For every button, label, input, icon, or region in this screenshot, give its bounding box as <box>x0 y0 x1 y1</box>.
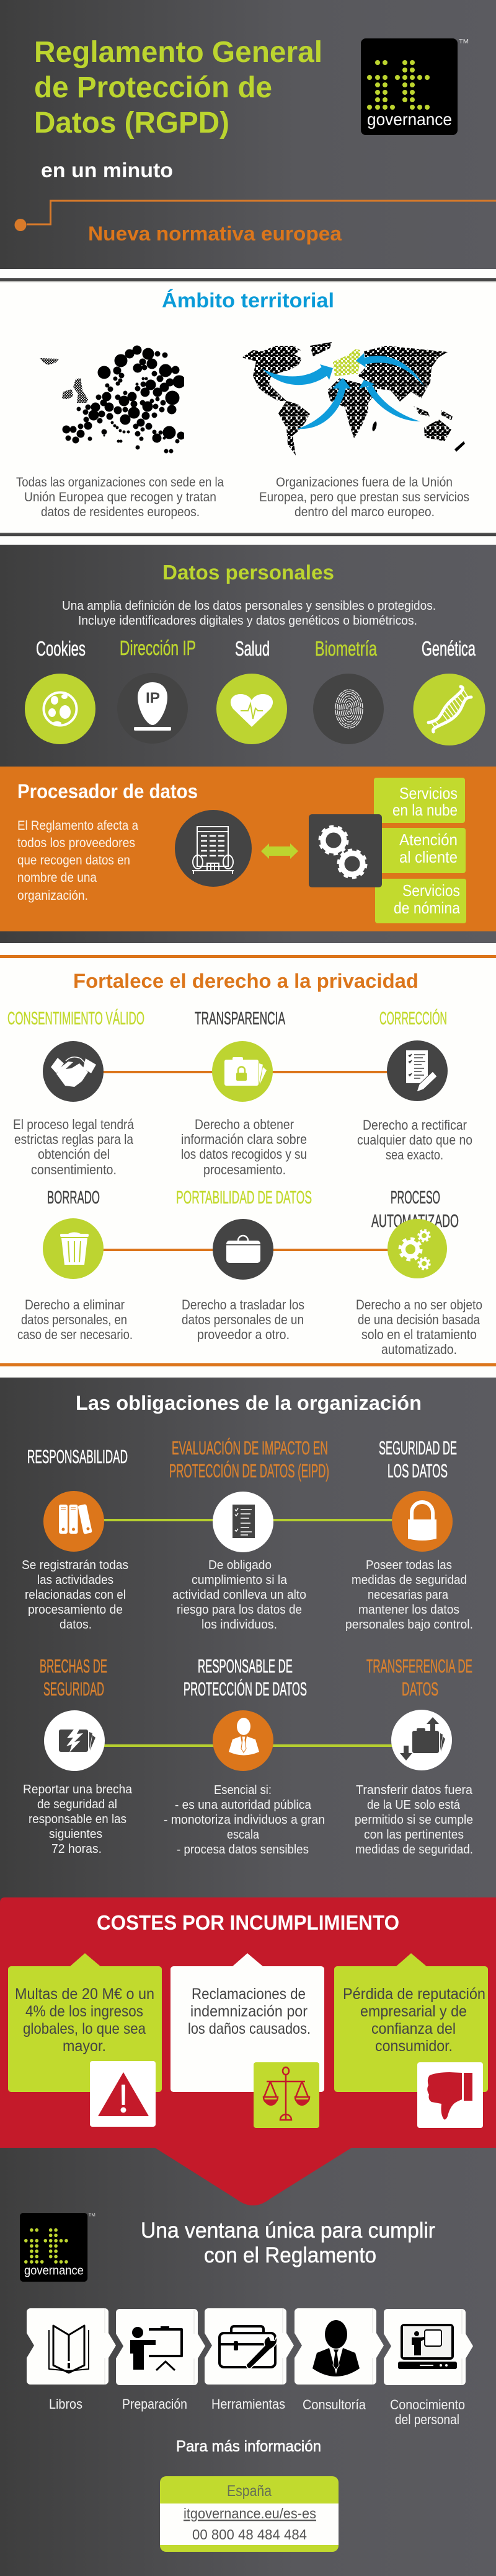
card: fines: mayor. <box>63 2038 106 2055</box>
services boxes: en la nube <box>392 801 458 819</box>
title: Reglamento General <box>34 36 322 69</box>
panel: non-compliance costs <box>0 1897 496 2205</box>
text: DPO: - monotoriza individuos a gran <box>164 1813 325 1827</box>
headings row 2: PORTABILIDAD DE DATOS <box>176 1188 312 1208</box>
text: accountability: las actividades <box>37 1573 113 1587</box>
icon: data transfer folder <box>391 1710 452 1770</box>
card: claims: los daños causados. <box>188 2020 311 2038</box>
icon: data protection officer <box>213 1710 273 1771</box>
panel: privacy rights <box>7 970 482 1357</box>
logo: IT Governance: TM <box>459 38 469 45</box>
headings row 2 <box>47 1188 459 1231</box>
heading <box>141 2218 435 2267</box>
headings row 2: PROCESO <box>391 1188 440 1208</box>
icon: security breach folder <box>44 1710 105 1771</box>
text: transfers: Transferir datos fuera <box>356 1783 473 1797</box>
text: data security <box>345 1558 473 1632</box>
panel: header <box>0 0 496 269</box>
text: accountability <box>22 1558 128 1632</box>
icon: erasure bin <box>43 1218 104 1279</box>
headings row 1: PROTECCIÓN DE DATOS (EIPD) <box>169 1460 329 1482</box>
card: reputation: Pérdida de reputación <box>343 1985 485 2003</box>
heading: COSTES POR INCUMPLIMIENTO <box>97 1911 399 1934</box>
tile: training <box>116 2309 205 2385</box>
body text: que recogen datos en <box>17 853 130 868</box>
connectors <box>73 1071 417 1251</box>
intro text: Una amplia definición de los datos personales y sensibles o protegidos. <box>62 599 436 613</box>
text: breaches <box>23 1783 133 1856</box>
text: data security: medidas de seguridad <box>352 1573 467 1587</box>
text: rectification: cualquier dato que no <box>357 1132 472 1148</box>
divider lines <box>0 955 496 1366</box>
text: transfers: medidas de seguridad. <box>355 1843 473 1857</box>
text: erasure <box>17 1297 133 1342</box>
panel: data processor <box>0 767 496 931</box>
subtitle: en un minuto <box>41 159 173 182</box>
text: DPIA: actividad conlleva un alto <box>172 1588 306 1602</box>
title: de Protección de <box>34 71 272 104</box>
body text: nombre de una <box>17 871 97 885</box>
title <box>34 36 322 139</box>
text: transfers: permitido si se cumple <box>355 1813 473 1827</box>
heading: con el Reglamento <box>204 2243 376 2267</box>
headings row 2: BRECHAS DE <box>40 1655 107 1677</box>
panel: one-stop compliance <box>20 2213 473 2552</box>
text: non-EU organisations: Organizaciones fuera de la Unión <box>276 475 453 490</box>
tile labels: Preparación <box>122 2396 187 2412</box>
icon: portability briefcase <box>213 1219 273 1280</box>
labels: Salud <box>235 637 270 660</box>
text: transfers: con las pertinentes <box>364 1828 464 1842</box>
services boxes: de nómina <box>394 899 460 917</box>
heading: Las obligaciones de la organización <box>76 1392 422 1414</box>
icon: warning <box>90 2061 156 2127</box>
text: data security: necesarias para <box>368 1588 449 1602</box>
labels: Cookies <box>36 637 86 660</box>
intro text <box>62 599 436 628</box>
services boxes: Atención <box>399 830 458 849</box>
headings row 1: EVALUACIÓN DE IMPACTO EN <box>172 1437 328 1459</box>
card: claims: indemnización por <box>190 2003 308 2020</box>
logo: IT Governance <box>361 38 469 135</box>
tile: tools <box>205 2308 294 2385</box>
text: transparency: información clara sobre <box>181 1132 307 1147</box>
tagline: Nueva normativa europea <box>88 222 342 245</box>
heading: Ámbito territorial <box>162 289 334 312</box>
icon: DPIA checklist <box>213 1492 273 1552</box>
text: valid consent <box>13 1117 135 1177</box>
text: EU organisations <box>16 475 224 519</box>
text: valid consent: El proceso legal tendrá <box>13 1117 135 1132</box>
icon: IP address pin: IP <box>146 690 160 706</box>
text: transparency <box>181 1117 307 1177</box>
text: portability: datos personales de un <box>182 1312 304 1327</box>
contact card: España <box>227 2482 272 2500</box>
connectors <box>74 1519 422 1747</box>
divider strips <box>0 278 496 537</box>
contact card <box>160 2476 339 2552</box>
text: valid consent: obtención del <box>38 1146 110 1162</box>
icon: automated gears <box>388 1219 447 1278</box>
headings row 2: SEGURIDAD <box>43 1678 104 1700</box>
text: automated processing <box>356 1297 482 1357</box>
text: non-EU organisations: dentro del marco europeo. <box>294 505 435 519</box>
panel: personal data <box>0 545 496 767</box>
card: reputation: empresarial y de <box>360 2003 467 2020</box>
text: DPO: Esencial si: <box>214 1783 272 1797</box>
text: accountability: relacionadas con el <box>25 1588 126 1602</box>
tile labels: Herramientas <box>211 2396 285 2412</box>
text: rectification: sea exacto. <box>386 1147 443 1163</box>
icon: processor gears <box>309 814 382 887</box>
text: non-EU organisations <box>259 475 469 519</box>
card: fines: globales, lo que sea <box>23 2020 146 2038</box>
labels <box>36 636 476 660</box>
body text: organización. <box>17 889 88 903</box>
icon: thumbs down <box>417 2062 483 2128</box>
text: accountability: procesamiento de <box>28 1603 123 1617</box>
text: transfers <box>355 1783 473 1857</box>
services boxes: Servicios <box>399 784 458 802</box>
body text: todos los proveedores <box>17 836 135 850</box>
headings row 2 <box>40 1655 472 1700</box>
text: breaches: de seguridad al <box>37 1798 117 1811</box>
text: rectification: Derecho a rectificar <box>363 1117 467 1133</box>
text: accountability: datos. <box>60 1618 92 1632</box>
headings row 2: BORRADO <box>47 1188 100 1208</box>
text: transfers: de la UE solo está <box>367 1798 461 1812</box>
icon: transparency folder <box>212 1041 273 1102</box>
map: world with arrows <box>242 342 465 455</box>
labels: Biometría <box>315 637 377 660</box>
text: non-EU organisations: Europea, pero que prestan sus servicios <box>259 490 469 504</box>
icon: health heart <box>216 674 287 744</box>
headings row 1: LOS DATOS <box>388 1460 448 1482</box>
text: erasure: datos personales, en <box>21 1312 127 1327</box>
icon: cookie <box>25 674 95 744</box>
heading: Datos personales <box>162 561 334 584</box>
card: claims <box>170 1953 324 2092</box>
contact card: 00 800 48 484 484 <box>192 2526 307 2543</box>
icon: security padlock <box>392 1491 453 1552</box>
logo: IT Governance small: TM <box>89 2213 95 2218</box>
text: breaches: responsable en las <box>29 1813 126 1826</box>
tile: staff awareness <box>384 2309 473 2385</box>
text: DPIA: cumplimiento si la <box>192 1573 288 1587</box>
text: EU organisations: Unión Europea que recogen y tratan <box>24 490 216 504</box>
card: reputation <box>334 1953 488 2092</box>
text: portability: proveedor a otro. <box>197 1327 290 1342</box>
headings row 1: TRANSPARENCIA <box>195 1009 285 1029</box>
text: accountability: Se registrarán todas <box>22 1558 128 1572</box>
labels: Dirección IP <box>120 636 196 659</box>
tile labels: Libros <box>49 2396 82 2412</box>
panel: territorial scope <box>16 289 469 519</box>
title: Datos (RGPD) <box>34 107 229 139</box>
text: breaches: siguientes <box>49 1827 102 1841</box>
text: automated processing: automatizado. <box>381 1342 457 1357</box>
card: reputation: confianza del <box>371 2020 456 2038</box>
text: transparency: procesamiento. <box>203 1162 286 1177</box>
headings row 1 <box>27 1437 457 1482</box>
heading: Fortalece el derecho a la privacidad <box>73 970 418 992</box>
text: transparency: los datos recogidos y su <box>181 1146 307 1162</box>
text: DPO: escala <box>227 1828 260 1842</box>
connector line <box>15 201 496 231</box>
more info heading: Para más información <box>176 2438 321 2455</box>
heading: Una ventana única para cumplir <box>141 2218 435 2243</box>
body text <box>17 819 138 903</box>
text: portability <box>182 1297 304 1342</box>
heading: Procesador de datos <box>17 780 198 802</box>
text: automated processing: solo en el tratamiento <box>361 1327 477 1342</box>
headings row 1: CONSENTIMIENTO VÁLIDO <box>7 1008 144 1029</box>
icon: handshake <box>43 1041 104 1102</box>
card: fines <box>8 1953 162 2092</box>
icon: fingerprint <box>313 674 384 744</box>
text: DPO <box>164 1783 325 1857</box>
text: DPIA: De obligado <box>208 1558 272 1572</box>
text: DPIA: los individuos. <box>202 1618 277 1632</box>
tile: consultancy <box>294 2308 384 2385</box>
text: erasure: caso de ser necesario. <box>17 1327 133 1342</box>
text: data security: personales bajo control. <box>345 1618 473 1632</box>
icon: scales <box>254 2062 319 2128</box>
contact card: itgovernance.eu/es-es <box>184 2505 316 2521</box>
card: reputation: consumidor. <box>375 2038 453 2055</box>
icon: record binders <box>43 1491 104 1552</box>
tile: books <box>27 2308 116 2385</box>
body text: El Reglamento afecta a <box>17 819 138 833</box>
text: EU organisations: Todas las organizaciones con sede en la <box>16 475 224 490</box>
text: transparency: Derecho a obtener <box>195 1117 294 1132</box>
headings row 1 <box>7 1008 447 1029</box>
services boxes <box>374 778 466 923</box>
text: portability: Derecho a trasladar los <box>182 1297 304 1312</box>
text: DPO: - procesa datos sensibles <box>177 1843 309 1857</box>
logo: IT Governance small <box>20 2213 95 2282</box>
icon: IP address pin <box>117 673 188 744</box>
text: rectification <box>357 1117 472 1163</box>
headings row 2: RESPONSABLE DE <box>198 1655 293 1677</box>
arrow: two-way <box>261 843 298 859</box>
text: data security: Poseer todas las <box>366 1558 452 1572</box>
icon: rectification checklist <box>387 1040 448 1101</box>
tile labels: Consultoría <box>303 2397 366 2412</box>
icon: DNA helix <box>413 674 485 745</box>
tile labels <box>49 2396 465 2427</box>
card: fines: Multas de 20 M€ o un <box>15 1985 154 2003</box>
card: claims: Reclamaciones de <box>192 1985 306 2003</box>
text: EU organisations: datos de residentes europeos. <box>41 505 200 519</box>
headings row 2: DATOS <box>402 1678 438 1700</box>
intro text: Incluye identificadores digitales y datos genéticos o biométricos. <box>78 613 417 628</box>
headings row 2: PROTECCIÓN DE DATOS <box>184 1678 307 1700</box>
text: breaches: Reportar una brecha <box>23 1783 133 1796</box>
text: DPO: - es una autoridad pública <box>175 1798 312 1812</box>
text: DPIA <box>172 1558 306 1632</box>
text: valid consent: consentimiento. <box>31 1162 117 1177</box>
card: fines: 4% de los ingresos <box>25 2003 143 2020</box>
text: valid consent: estrictas reglas para la <box>14 1132 134 1147</box>
logo: IT Governance: governance <box>367 110 452 129</box>
text: breaches: 72 horas. <box>51 1842 102 1856</box>
dark strip <box>0 931 496 943</box>
text: DPIA: riesgo para los datos de <box>177 1603 302 1617</box>
icon: office building <box>175 810 252 887</box>
logo: IT Governance small: governance <box>24 2264 84 2278</box>
headings row 1: RESPONSABILIDAD <box>27 1446 128 1467</box>
map: Europe dots <box>40 346 185 453</box>
text: erasure: Derecho a eliminar <box>25 1297 125 1312</box>
services boxes: al cliente <box>399 848 458 866</box>
tile labels: Conocimiento <box>390 2397 465 2412</box>
text: data security: mantener los datos <box>358 1603 459 1617</box>
services boxes: Servicios <box>402 881 460 900</box>
panel: organisation obligations <box>0 1378 496 2576</box>
tile labels: del personal <box>395 2412 459 2427</box>
